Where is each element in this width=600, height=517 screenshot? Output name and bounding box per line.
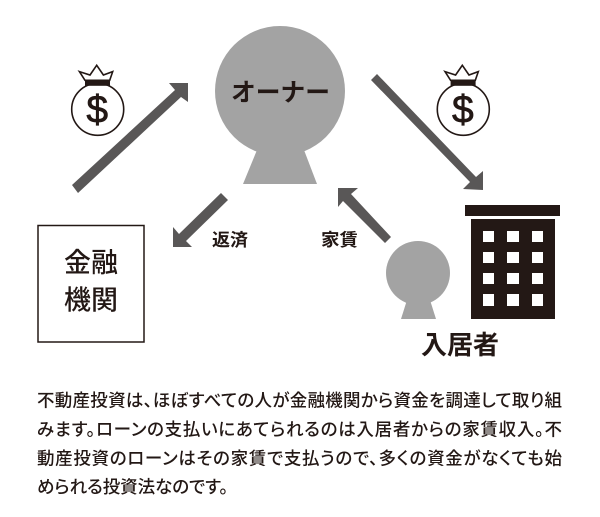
panel: financial institution box: [38, 226, 144, 342]
icon: money bag left: [72, 65, 124, 135]
text block: explanation: められる投資法なのです。: [37, 477, 228, 497]
label: repayment: 返済: [212, 230, 249, 250]
label: owner: オーナー: [231, 79, 330, 107]
arrow: owner to building: [371, 74, 483, 190]
text block: explanation: 動産投資のローンはその家賃で支払うので、多くの資金がなくても始: [37, 448, 562, 468]
icon: owner figure: [215, 26, 345, 184]
icon: tenant figure: [386, 241, 450, 319]
arrow: financial institution to owner: [72, 83, 188, 193]
icon: money bag left: $: [86, 88, 108, 131]
label: financial institution: 金融: [64, 248, 118, 278]
arrow: repayment to financial institution: [173, 193, 228, 247]
label: tenant: 入居者: [421, 330, 499, 360]
text block: explanation: [37, 390, 562, 497]
label: rent: 家賃: [321, 230, 358, 250]
arrow: rent to owner: [338, 188, 391, 243]
text block: explanation: 不動産投資は、ほぼすべての人が金融機関から資金を調達して取り組: [37, 390, 562, 410]
icon: apartment building: [465, 205, 560, 319]
text block: explanation: みます。ローンの支払いにあてられるのは入居者からの家賃収入。不: [37, 420, 562, 440]
label: financial institution: 機関: [64, 286, 118, 316]
icon: money bag right: $: [452, 88, 474, 131]
icon: money bag right: [437, 65, 489, 135]
